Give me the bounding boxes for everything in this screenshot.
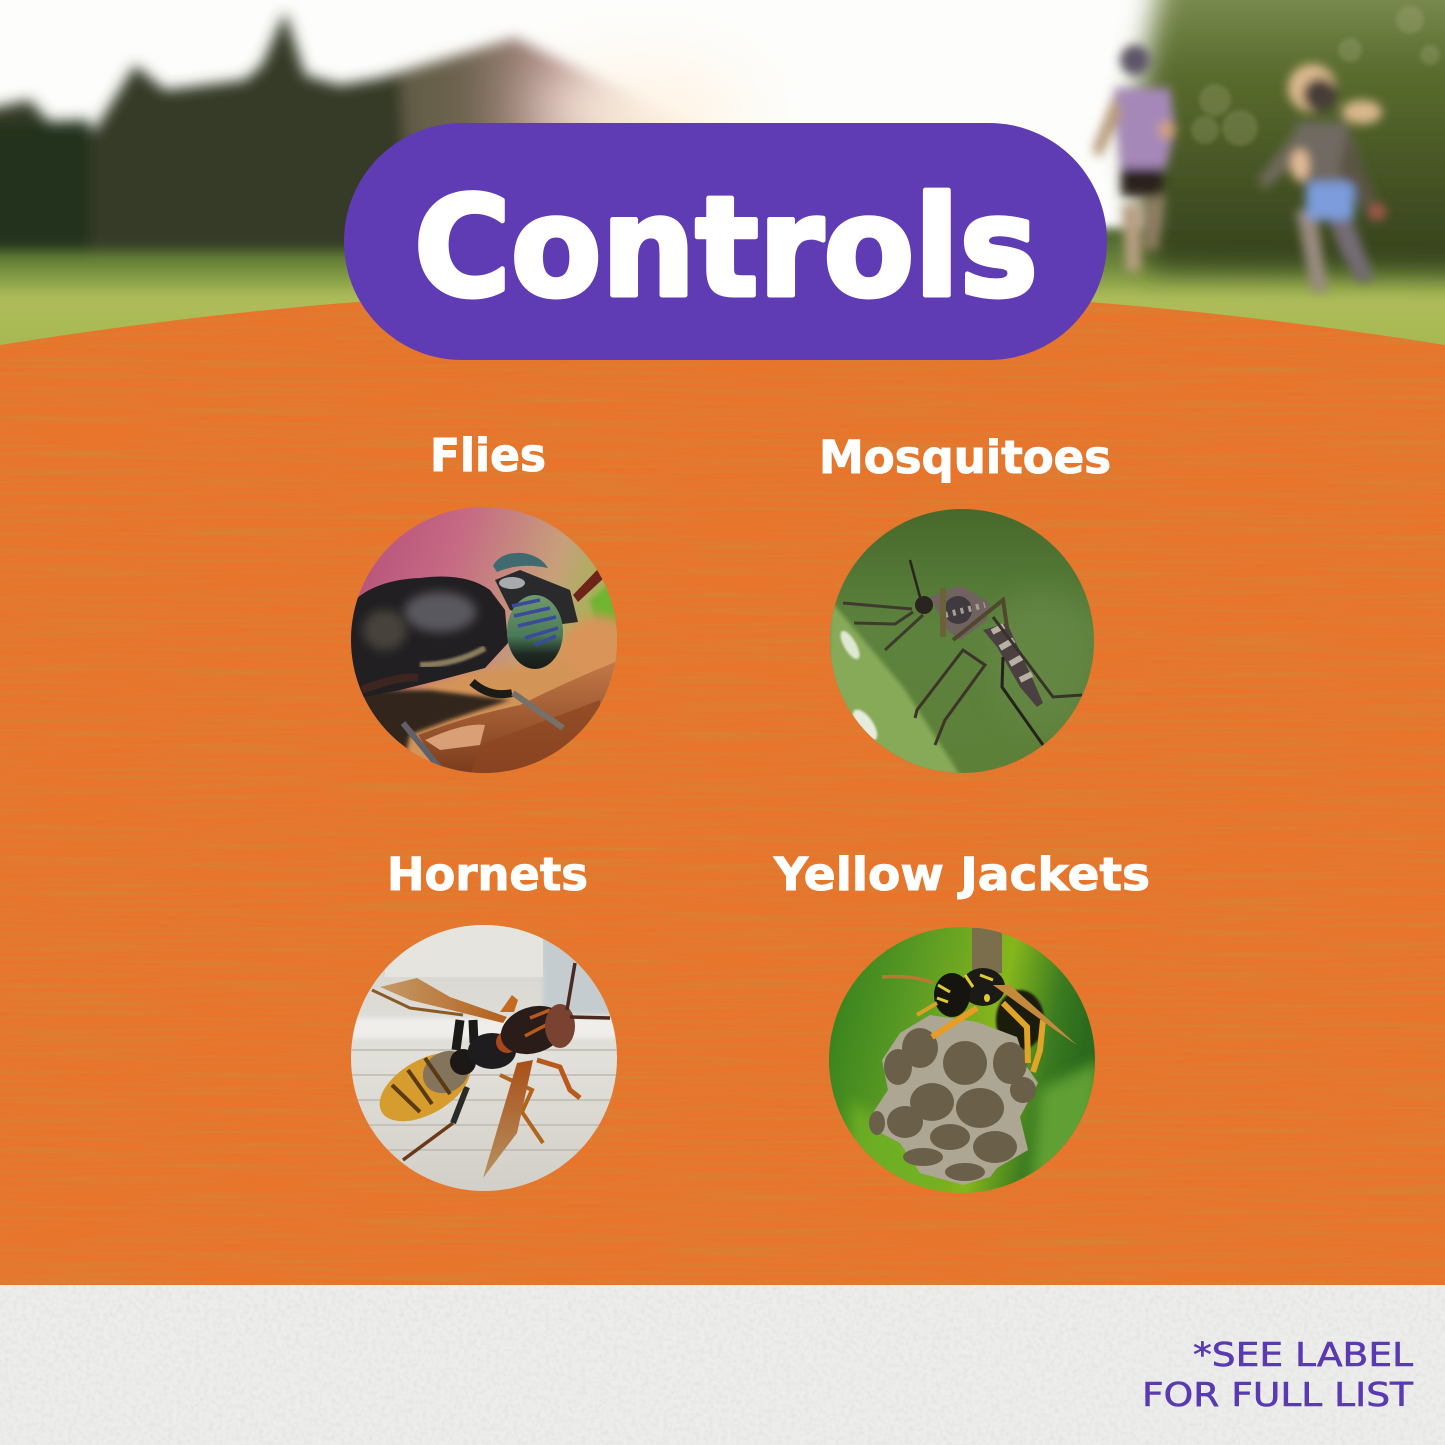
footnote xyxy=(1142,1335,1414,1414)
footnote line 1: *SEE LABEL xyxy=(1193,1335,1414,1374)
bottom textured grey strip xyxy=(0,1285,1445,1445)
photo: hornet xyxy=(350,924,618,1192)
child in blue diaper xyxy=(1258,64,1386,292)
child in purple shirt xyxy=(1092,45,1176,272)
house and tree line xyxy=(0,12,705,250)
heading: Hornets: Hornets xyxy=(387,848,588,901)
grass lawn xyxy=(0,228,1445,368)
heading: Yellow Jackets: Yellow Jackets xyxy=(773,848,1150,901)
photo: yellow jacket xyxy=(826,924,1100,1200)
photo: fly xyxy=(350,506,625,780)
right-hand trees xyxy=(1130,0,1445,272)
heading: Mosquitoes: Mosquitoes xyxy=(819,431,1111,484)
heading: Flies: Flies xyxy=(430,429,546,482)
footnote line 2: FOR FULL LIST xyxy=(1142,1375,1414,1414)
orange wood panel with curved top xyxy=(0,285,1445,1285)
photo: mosquito xyxy=(826,507,1096,775)
background photo: blurred backyard with children running xyxy=(0,0,1445,368)
title pill xyxy=(344,123,1107,360)
title text: Controls xyxy=(414,167,1038,328)
